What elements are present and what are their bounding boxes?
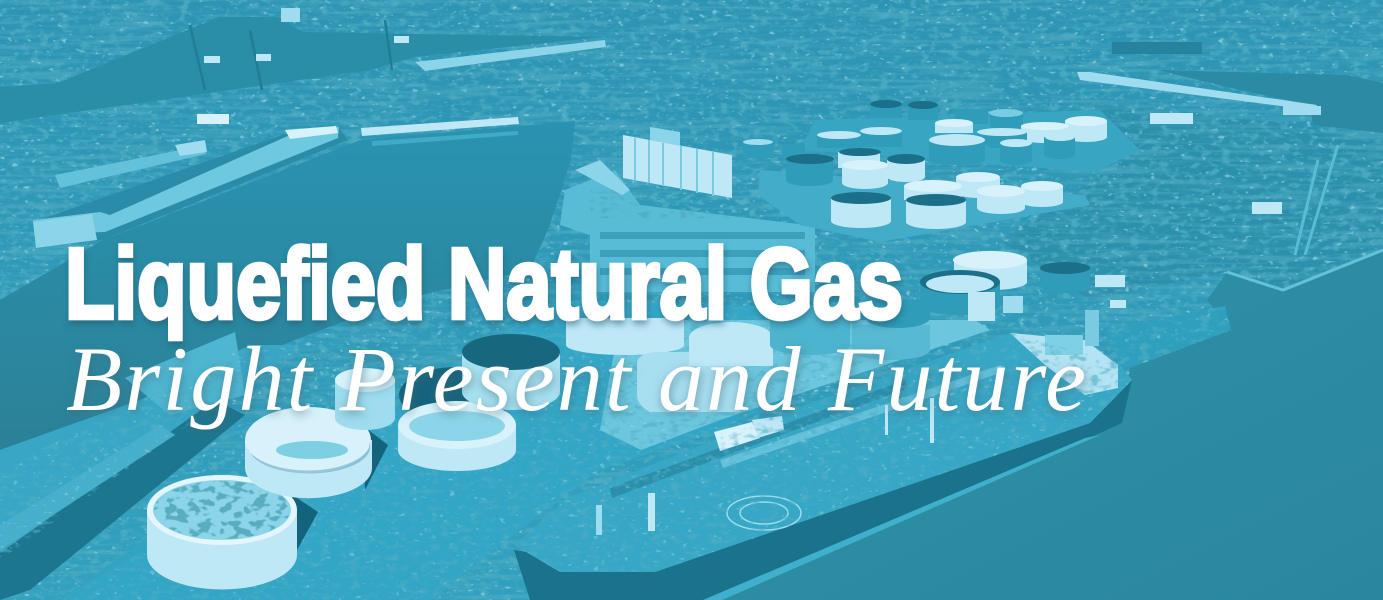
tank farm pad xyxy=(758,170,1090,242)
dark roof tank xyxy=(462,334,560,410)
tank, centre left xyxy=(398,367,516,471)
right waterfront edge xyxy=(1227,250,1383,290)
small tank behind xyxy=(335,368,395,430)
tank farm, front rows xyxy=(786,154,1063,229)
top-right dock strip xyxy=(1077,72,1317,110)
water: top right basin xyxy=(1157,70,1383,133)
heading: Liquefied Natural Gas: Liquefied Natural Gas xyxy=(65,228,903,340)
process plant building xyxy=(560,170,815,292)
water: central harbour xyxy=(0,121,575,450)
silos xyxy=(575,127,732,198)
left dock and ship xyxy=(0,332,300,600)
quay building xyxy=(714,416,784,451)
large tank with textured roof xyxy=(147,475,318,589)
water: lower right sea xyxy=(703,250,1383,600)
dock tanks, right xyxy=(920,251,1126,321)
tank farm, back rows xyxy=(743,100,1107,168)
moored barge xyxy=(1103,306,1231,368)
tanker ship xyxy=(514,310,1132,600)
ship masts xyxy=(596,398,934,535)
cranes and small ship, top xyxy=(190,8,409,124)
title block xyxy=(65,228,1086,430)
water: top left channel xyxy=(0,17,600,123)
pier: upper left xyxy=(33,40,606,248)
tanks behind the title xyxy=(566,300,930,412)
tank farm upper pad xyxy=(800,110,1140,172)
central quay xyxy=(60,300,900,600)
top-right buildings xyxy=(1112,42,1338,255)
tank bund xyxy=(600,320,990,450)
open tank, left xyxy=(245,407,388,498)
subheading: Bright Present and Future: Bright Present and Future xyxy=(66,328,1086,430)
